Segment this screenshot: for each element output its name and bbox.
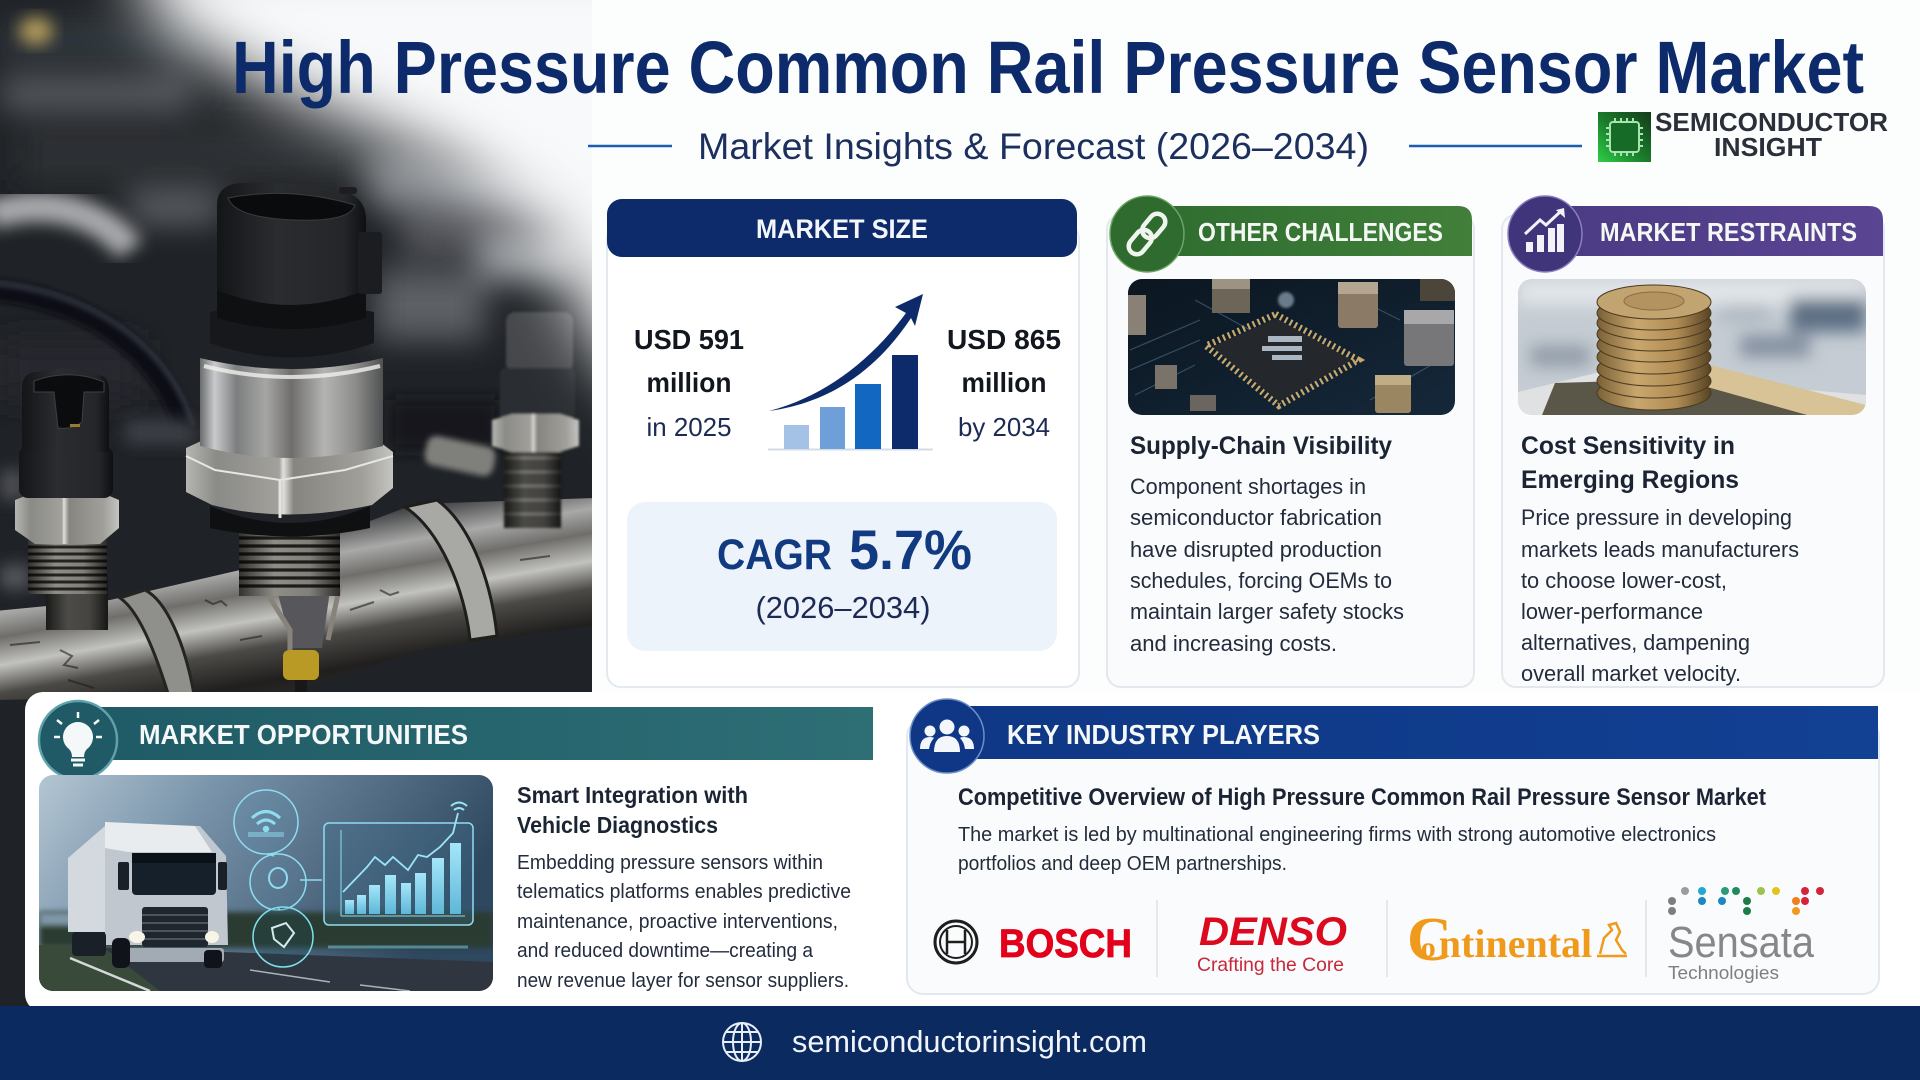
text: competitive overview heading: Competitive Overview of High Pressure Common Rail Pressure Sensor Market bbox=[958, 784, 1766, 811]
logo: Denso: DENSO bbox=[1199, 910, 1347, 954]
white fade over photo top bbox=[120, 0, 680, 440]
callout: CAGR: 5.7% bbox=[849, 518, 972, 581]
text: opportunities body: telematics platforms enables predictive bbox=[517, 880, 851, 903]
logo: Bosch: BOSCH bbox=[999, 922, 1132, 966]
text: challenges body: schedules, forcing OEMs to bbox=[1130, 568, 1392, 593]
brand logo bbox=[1598, 107, 1888, 162]
icon: light bulb bbox=[39, 701, 117, 779]
text: restraints body: overall market velocity. bbox=[1521, 661, 1741, 686]
heading: market opportunities bbox=[78, 707, 873, 760]
logo: Continental: o bbox=[1421, 931, 1436, 964]
text: challenges body: semiconductor fabrication bbox=[1130, 505, 1382, 530]
2034 value bbox=[947, 324, 1061, 442]
text: restraints body: markets leads manufacturers bbox=[1521, 537, 1799, 562]
icon: left small pressure sensor bbox=[15, 368, 119, 630]
brand logo: INSIGHT bbox=[1714, 132, 1822, 162]
text: opportunities body: maintenance, proactive interventions, bbox=[517, 910, 838, 933]
logo: Bosch bbox=[935, 921, 1132, 966]
logo: Sensata bbox=[1668, 887, 1824, 983]
electronic components bbox=[1128, 279, 1455, 413]
icon: green chip bbox=[1598, 112, 1651, 162]
text: opportunities body: Embedding pressure sensors within bbox=[517, 851, 823, 874]
heading: market size bbox=[607, 199, 1077, 257]
logo: Continental: C bbox=[1407, 906, 1452, 974]
text: smart integration: Vehicle Diagnostics bbox=[517, 812, 718, 838]
logo: Denso: Crafting the Core bbox=[1197, 954, 1344, 976]
brand logo: SEMICONDUCTOR bbox=[1655, 107, 1888, 137]
text: competitive overview body: portfolios and deep OEM partnerships. bbox=[958, 852, 1287, 875]
heading: key industry players bbox=[947, 706, 1878, 759]
text: smart integration: Smart Integration with bbox=[517, 782, 748, 808]
text: opportunities body bbox=[517, 851, 851, 992]
heading: other challenges bbox=[1150, 206, 1472, 256]
heading: other challenges: OTHER CHALLENGES bbox=[1198, 217, 1443, 247]
chart: holographic bars bbox=[324, 802, 473, 947]
logo: Sensata: Sensata bbox=[1668, 918, 1814, 967]
icon: truck bbox=[68, 822, 228, 968]
text: challenges body bbox=[1130, 474, 1404, 656]
subtitle: Market Insights & Forecast (2026–2034) bbox=[698, 126, 1369, 167]
text: supply-chain visibility: Supply-Chain Visibility bbox=[1130, 432, 1392, 460]
panel: other challenges bbox=[1107, 196, 1474, 687]
2034 value: by 2034 bbox=[958, 412, 1050, 442]
2025 value: million bbox=[646, 367, 732, 398]
image: truck with telematics bbox=[39, 775, 493, 991]
icon: globe bbox=[723, 1023, 761, 1061]
icon: chain link bbox=[1110, 196, 1184, 272]
icon: telematics circles bbox=[234, 790, 322, 967]
heading: market opportunities: MARKET OPPORTUNITIES bbox=[139, 719, 468, 750]
logo: Sensata: Technologies bbox=[1668, 962, 1779, 983]
text: restraints body: lower-performance bbox=[1521, 599, 1703, 624]
panel: market size bbox=[607, 199, 1079, 687]
engine photo background bbox=[0, 0, 600, 1006]
callout: CAGR bbox=[627, 502, 1057, 651]
text: restraints body: to choose lower-cost, bbox=[1521, 568, 1727, 593]
logo: Continental: ntinental bbox=[1439, 921, 1592, 966]
text: challenges body: Component shortages in bbox=[1130, 474, 1366, 499]
text: opportunities body: new revenue layer for sensor suppliers. bbox=[517, 969, 849, 992]
image: stack of coins bbox=[1518, 279, 1866, 420]
text: restraints body: Price pressure in developing bbox=[1521, 505, 1792, 530]
lower white band bbox=[25, 692, 1920, 1012]
heading: key industry players: KEY INDUSTRY PLAYERS bbox=[1007, 719, 1320, 750]
text: challenges body: and increasing costs. bbox=[1130, 631, 1337, 656]
text: restraints body: alternatives, dampening bbox=[1521, 630, 1750, 655]
footer bar bbox=[0, 1006, 1920, 1080]
2034 value: USD 865 bbox=[947, 324, 1061, 355]
text: cost sensitivity: Cost Sensitivity in bbox=[1521, 432, 1735, 460]
footer url: semiconductorinsight.com bbox=[792, 1024, 1147, 1059]
icon: rising chart bbox=[1508, 196, 1582, 272]
text: challenges body: have disrupted production bbox=[1130, 537, 1382, 562]
white content background bbox=[592, 0, 1920, 1010]
icon: main pressure sensor bbox=[186, 182, 393, 698]
image: circuit board chip bbox=[1128, 279, 1455, 415]
callout: CAGR: CAGR bbox=[717, 531, 832, 579]
bar chart with growth arrow bbox=[768, 294, 933, 450]
text: challenges body: maintain larger safety stocks bbox=[1130, 599, 1404, 624]
text: cost sensitivity: Emerging Regions bbox=[1521, 466, 1739, 494]
text: competitive overview body: The market is led by multinational engineering firms with strong automotive electronics bbox=[958, 823, 1716, 846]
2025 value bbox=[634, 324, 744, 442]
text: competitive overview body bbox=[958, 823, 1716, 875]
icon: right background sensor bbox=[492, 312, 579, 528]
icon: fuel rail pipe bbox=[0, 434, 595, 700]
text: restraints body bbox=[1521, 505, 1799, 686]
text: smart integration bbox=[517, 782, 748, 838]
heading: market size: MARKET SIZE bbox=[756, 214, 928, 244]
2025 value: in 2025 bbox=[646, 412, 732, 442]
text: cost sensitivity bbox=[1521, 432, 1739, 494]
icon: people bbox=[910, 699, 984, 773]
heading: market restraints: MARKET RESTRAINTS bbox=[1600, 217, 1857, 247]
callout: CAGR: (2026–2034) bbox=[756, 590, 930, 625]
logo: Denso bbox=[1197, 910, 1347, 976]
logo: Continental bbox=[1407, 906, 1627, 974]
panel: market opportunities bbox=[39, 701, 873, 992]
heading: market restraints bbox=[1545, 206, 1883, 256]
panel: market restraints bbox=[1502, 196, 1884, 687]
panel: key industry players bbox=[907, 699, 1879, 994]
2025 value: USD 591 bbox=[634, 324, 744, 355]
text: opportunities body: and reduced downtime—creating a bbox=[517, 939, 814, 962]
2034 value: million bbox=[962, 367, 1046, 398]
